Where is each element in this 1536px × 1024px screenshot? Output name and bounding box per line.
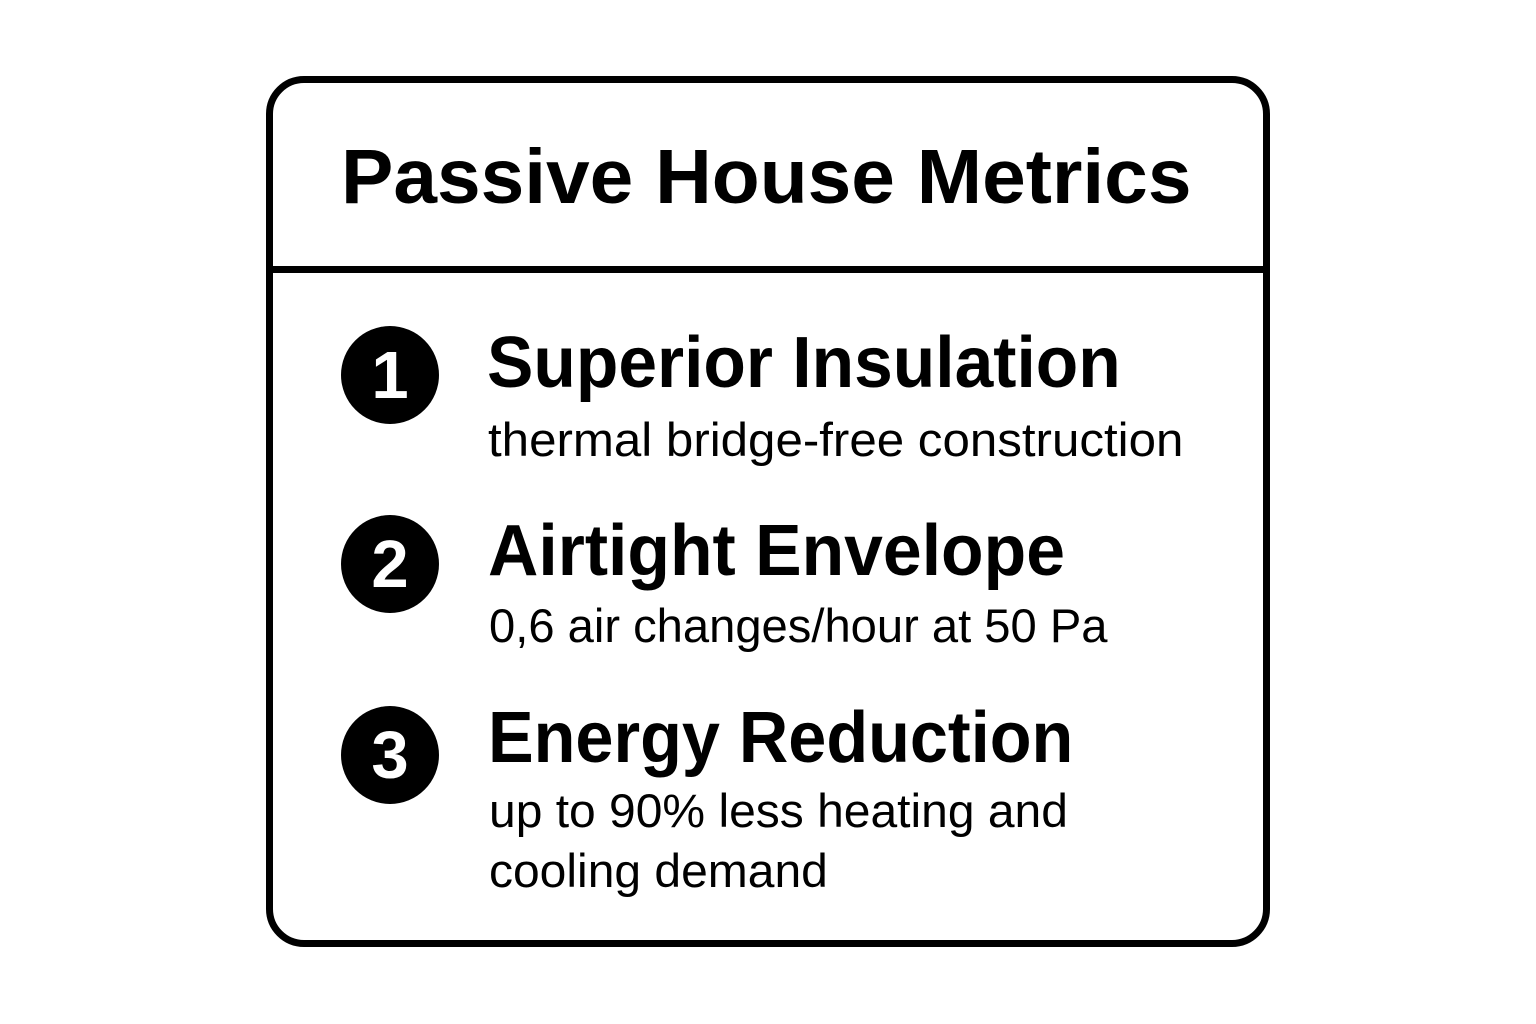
- text: insulation detail: thermal bridge-free construction: [488, 413, 1183, 466]
- text: energy detail: [489, 784, 1068, 897]
- text: airtightness detail: 0,6 air changes/hour at 50 Pa: [489, 599, 1108, 652]
- icon: number 2: 2: [371, 527, 409, 602]
- text: energy detail: cooling demand: [489, 844, 828, 897]
- heading: energy reduction: Energy Reduction: [488, 698, 1073, 778]
- heading: superior insulation: Superior Insulation: [487, 323, 1121, 403]
- heading: airtight envelope: Airtight Envelope: [488, 511, 1065, 591]
- icon: number 3: [341, 706, 439, 804]
- icon: number 3: 3: [371, 718, 409, 793]
- panel: metrics card: [266, 76, 1270, 947]
- divider: [270, 266, 1266, 273]
- text: energy detail: up to 90% less heating and: [489, 784, 1068, 837]
- icon: number 2: [341, 515, 439, 613]
- title: Passive House Metrics: [341, 134, 1191, 220]
- icon: number 1: 1: [371, 338, 409, 413]
- icon: number 1: [341, 326, 439, 424]
